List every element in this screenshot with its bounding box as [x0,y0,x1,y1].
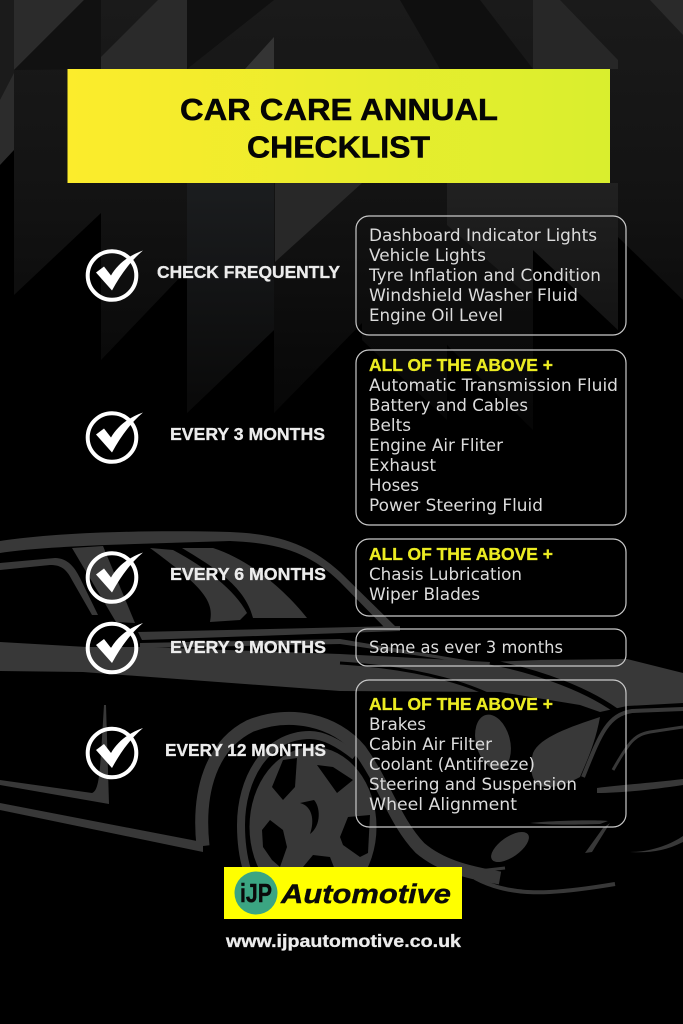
panel: every 12 months items: Cabin Air Filter [369,735,492,754]
panel: every 3 months items: Engine Air Fliter [369,436,503,455]
panel: every 3 months items: Belts [369,416,411,435]
title banner [68,69,610,183]
panel: every 12 months items: Brakes [369,715,426,734]
panel: check frequently items: Tyre Inflation and Condition [368,266,601,285]
label: check frequently: CHECK FREQUENTLY [157,262,340,282]
logo badge: iJP [240,878,272,908]
panel: every 9 months items [356,629,626,666]
label: every 3 months: EVERY 3 MONTHS [170,424,325,444]
website url: www.ijpautomotive.co.uk [225,931,461,951]
title text: CHECKLIST [247,130,430,164]
panel: every 3 months items: ALL OF THE ABOVE + [369,355,553,375]
panel: every 3 months items: Automatic Transmission Fluid [369,376,618,395]
icon: check mark [88,552,143,602]
panel: every 6 months items: ALL OF THE ABOVE + [369,544,553,564]
panel: every 9 months items: Same as ever 3 months [369,638,563,657]
panel: every 3 months items: Hoses [369,476,419,495]
panel: check frequently items [356,216,626,335]
panel: every 12 months items: Steering and Suspension [369,775,577,794]
panel: every 3 months items: Power Steering Fluid [369,496,543,515]
panel: every 3 months items: Exhaust [369,456,437,475]
panel: check frequently items: Dashboard Indicator Lights [369,226,597,245]
label: every 6 months: EVERY 6 MONTHS [170,564,326,584]
background: car silhouette [0,531,683,907]
row: check frequently [88,216,626,335]
background: chevron pattern [0,0,683,430]
logo: iJP Automotive [224,867,462,919]
icon: check mark [88,728,143,777]
panel: every 6 months items [356,539,626,616]
panel: check frequently items: Engine Oil Level [369,306,503,325]
icon: check mark [88,412,143,462]
row: every 12 months [88,680,626,827]
label: every 12 months: EVERY 12 MONTHS [165,740,326,760]
logo badge [234,872,278,914]
logo wordmark: Automotive [280,879,451,909]
row: every 9 months [88,623,626,672]
panel: every 6 months items: Chasis Lubrication [369,565,522,584]
panel: check frequently items: Windshield Washer Fluid [369,286,578,305]
title text: CAR CARE ANNUAL [180,92,498,127]
row: every 6 months [88,539,626,616]
panel: every 3 months items: Battery and Cables [369,396,528,415]
panel: every 12 months items [356,680,626,827]
label: every 9 months: EVERY 9 MONTHS [170,637,326,657]
panel: every 3 months items [356,350,626,525]
row: every 3 months [88,350,626,525]
panel: every 6 months items: Wiper Blades [369,585,480,604]
panel: every 12 months items: Coolant (Antifreeze) [369,755,535,774]
icon: check mark [88,250,143,300]
panel: check frequently items: Vehicle Lights [369,246,486,265]
icon: check mark [88,623,143,672]
panel: every 12 months items: ALL OF THE ABOVE + [369,694,553,714]
panel: every 12 months items: Wheel Alignment [369,795,518,814]
